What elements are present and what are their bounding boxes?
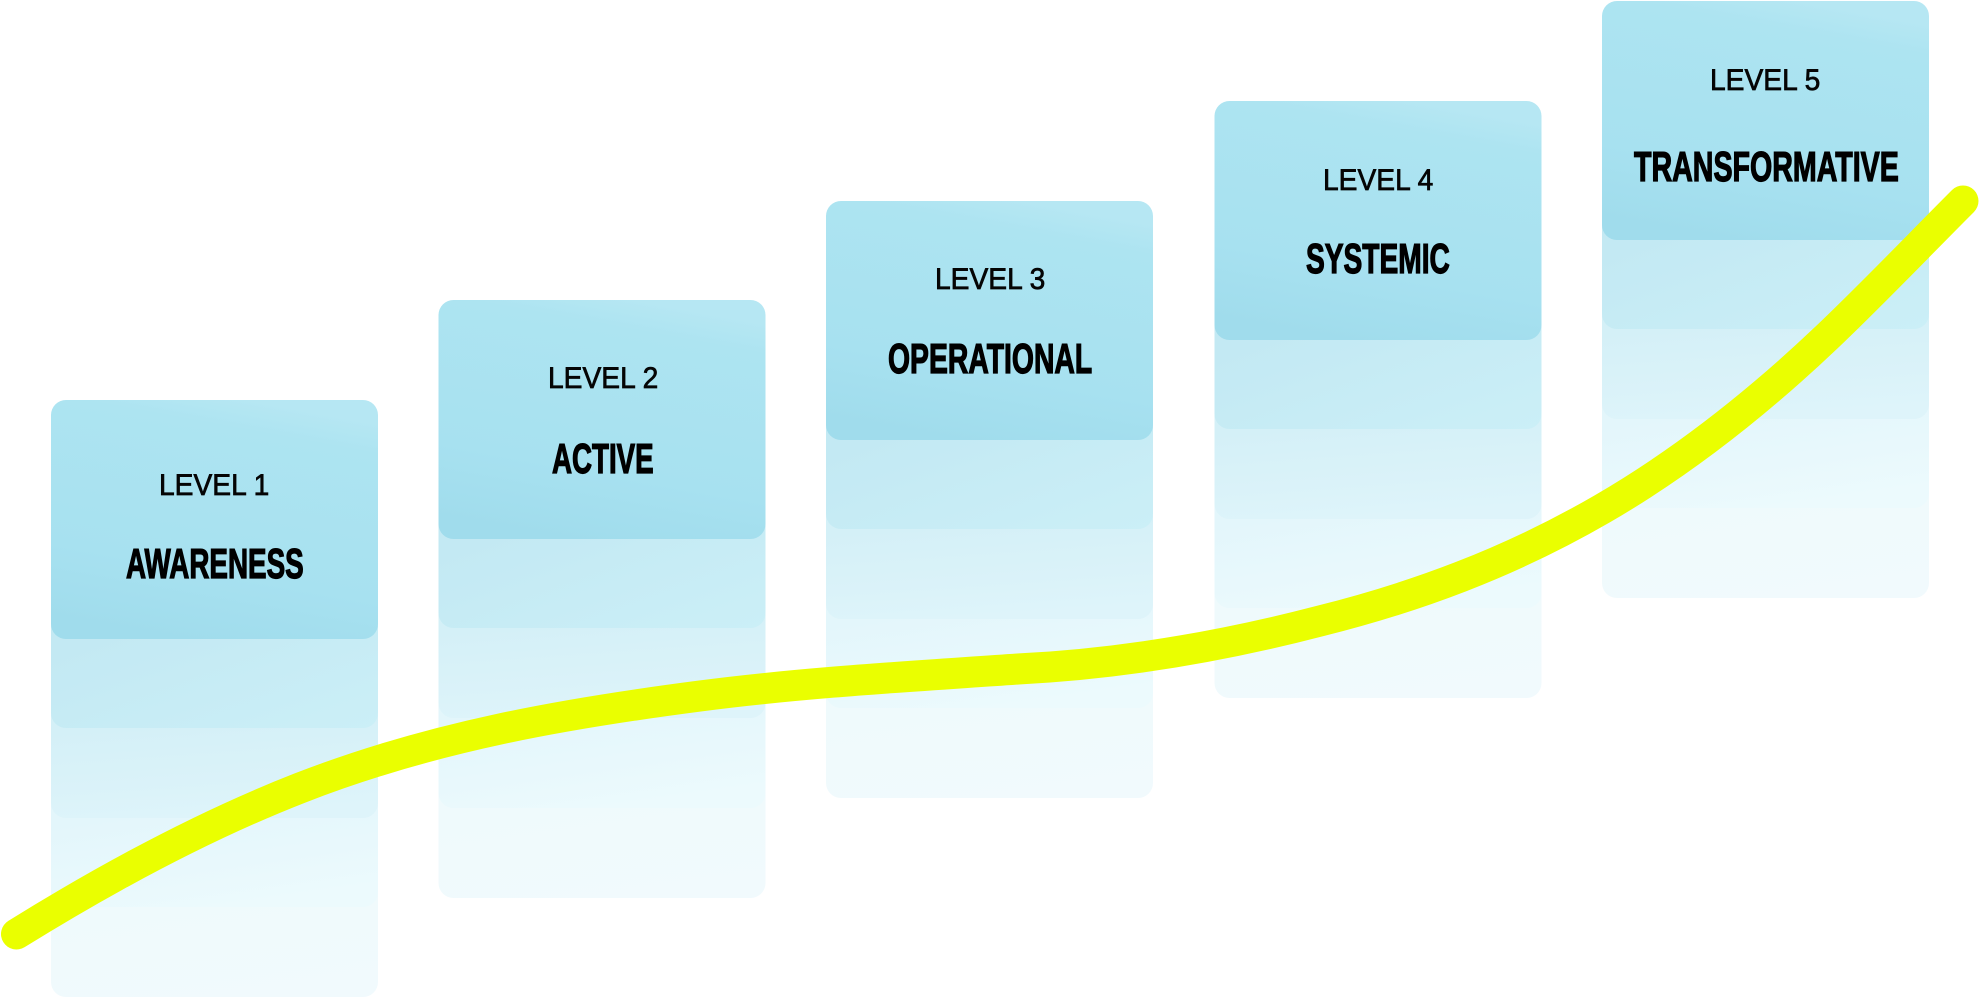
label: level 2: LEVEL 2	[548, 362, 658, 395]
heading: transformative: TRANSFORMATIVE	[1634, 143, 1899, 190]
heading: active: ACTIVE	[552, 435, 654, 482]
panel: level 5 transformative	[1602, 1, 1929, 598]
label: level 1: LEVEL 1	[159, 469, 269, 502]
panel: level 3 operational	[826, 201, 1153, 798]
label: level 5: LEVEL 5	[1710, 64, 1820, 97]
heading: operational: OPERATIONAL	[888, 335, 1092, 382]
panel: level 2 active	[438, 300, 766, 898]
heading: systemic: SYSTEMIC	[1306, 235, 1450, 282]
label: level 3: LEVEL 3	[935, 263, 1045, 296]
panel: level 1 awareness	[51, 400, 378, 997]
label: level 4: LEVEL 4	[1323, 164, 1433, 197]
panel: level 4 systemic	[1214, 101, 1542, 698]
growth curve	[16, 201, 1963, 934]
heading: awareness: AWARENESS	[126, 540, 304, 587]
